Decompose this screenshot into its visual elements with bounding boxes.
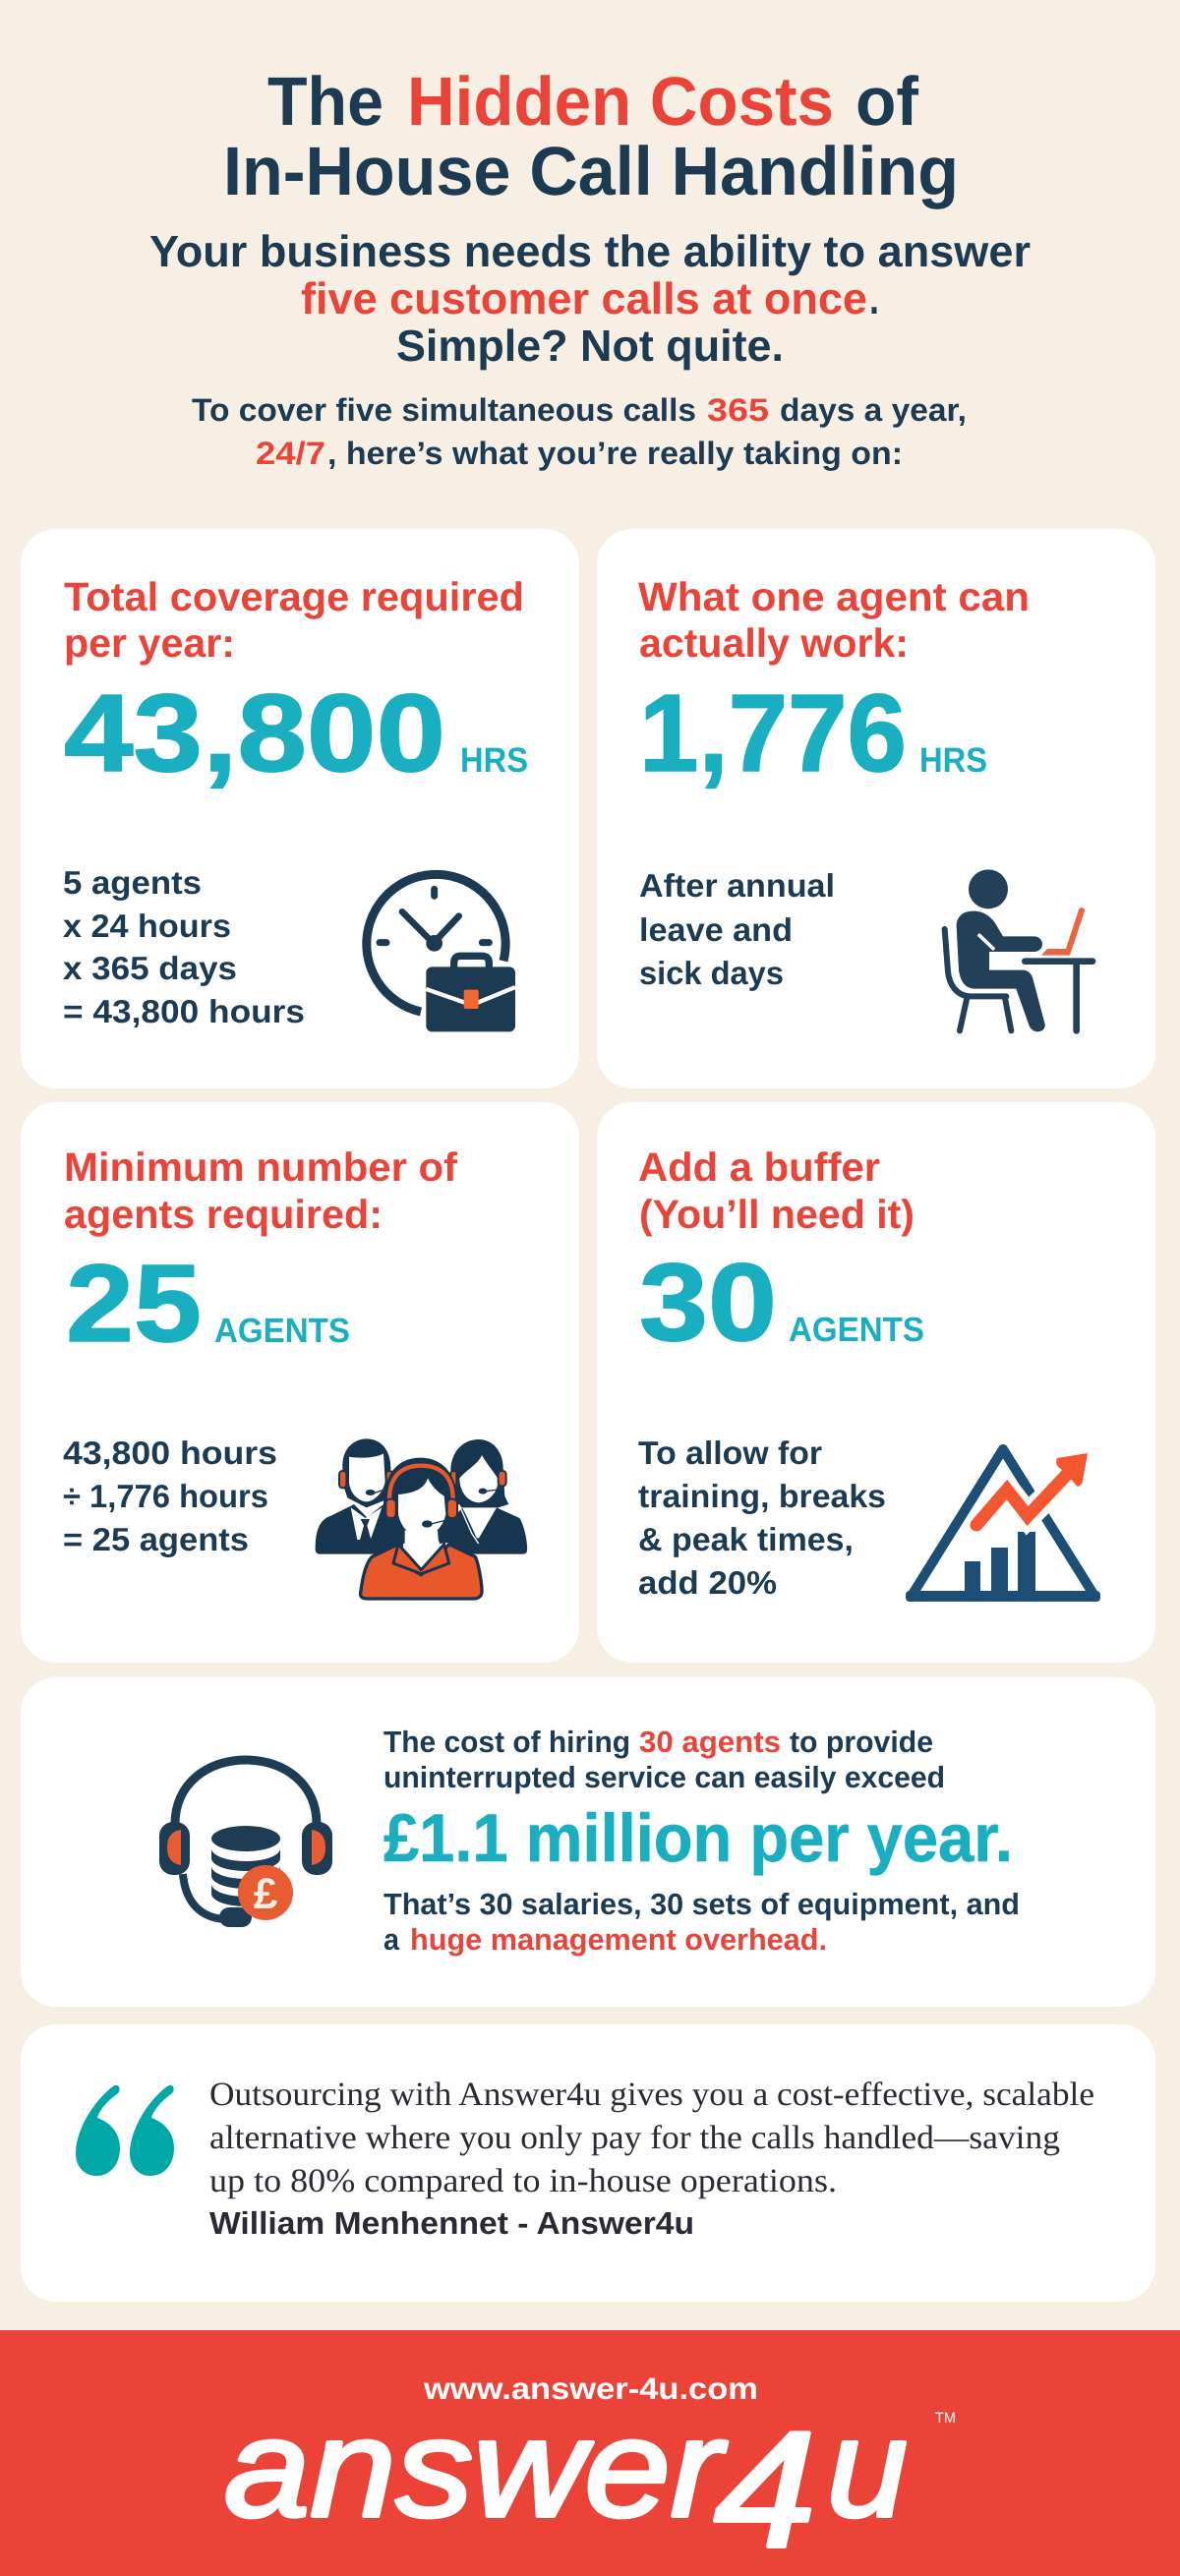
- stat: 1,776 HRS: 1,776: [639, 672, 907, 794]
- heading: buffer: [638, 1144, 914, 1237]
- heading: minimum agents: agents required:: [64, 1192, 383, 1237]
- footer band: [0, 2330, 1180, 2576]
- stat: 25 AGENTS: 25: [66, 1242, 202, 1365]
- quote text: Outsourcing with Answer4u gives you a cost-effective, scalable: [209, 2077, 1094, 2113]
- stat: £1.1 million per year: £1.1 million per year.: [384, 1800, 1013, 1876]
- title: Hidden Costs: [407, 63, 834, 140]
- cost intro text: to provide: [790, 1726, 933, 1759]
- quote text: alternative where you only pay for the calls handled—saving: [209, 2120, 1060, 2156]
- intro text: 24/7: [256, 436, 325, 471]
- logo wordmark: [224, 2390, 908, 2576]
- note text: add 20%: [638, 1564, 777, 1601]
- quote attribution: William Menhennet - Answer4u: [209, 2205, 694, 2241]
- heading: total coverage: per year:: [64, 620, 235, 666]
- quote text: up to 80% compared to in-house operations.: [209, 2163, 837, 2199]
- intro text: , here’s what you’re really taking on:: [327, 436, 903, 471]
- calculation text: 43,800 hours: [63, 1434, 277, 1471]
- calculation text: x 24 hours: [63, 907, 231, 944]
- stat: 30 AGENTS: 30: [639, 1241, 777, 1364]
- icon: headset with coins and pound: £: [254, 1870, 278, 1918]
- title: [223, 63, 959, 209]
- panel: quote: [21, 2024, 1155, 2302]
- note text: After annual: [639, 867, 835, 904]
- quote text: [209, 2077, 1094, 2199]
- note text: training, breaks: [638, 1478, 886, 1514]
- icon: person at laptop: [945, 869, 1092, 1031]
- trademark: TM: [935, 2410, 956, 2427]
- intro text: 365: [707, 392, 769, 428]
- cost detail text: [384, 1888, 1020, 1957]
- note text: [639, 867, 835, 991]
- title: In-House Call Handling: [223, 133, 959, 209]
- panel: one agent: [597, 529, 1155, 1088]
- website url: www.answer-4u.com: [423, 2371, 758, 2406]
- heading: minimum agents: [64, 1144, 457, 1237]
- panel: buffer: [597, 1102, 1155, 1663]
- panel: minimum agents: [21, 1102, 579, 1663]
- heading: buffer: Add a buffer: [638, 1144, 880, 1190]
- intro text: days a year,: [780, 392, 967, 428]
- calculation text: ÷ 1,776 hours: [63, 1478, 268, 1514]
- cost detail text: huge management overhead.: [410, 1923, 827, 1957]
- calculation text: 5 agents: [63, 864, 202, 901]
- heading: one agent: actually work:: [639, 620, 909, 666]
- icon: quotation marks: [76, 2085, 174, 2176]
- note text: [638, 1434, 886, 1601]
- cost detail text: That’s 30 salaries, 30 sets of equipment, and: [384, 1888, 1020, 1921]
- stat: 43,800 HRS: 43,800: [64, 672, 445, 794]
- calculation text: [63, 1434, 277, 1557]
- calculation text: [63, 864, 305, 1029]
- logo wordmark: answer: [224, 2390, 728, 2547]
- icon: call centre agents: [316, 1438, 527, 1599]
- heading: one agent: What one agent can: [638, 574, 1030, 619]
- note text: leave and: [639, 911, 793, 948]
- subtitle: five customer calls at once: [301, 273, 867, 323]
- heading: total coverage: Total coverage required: [64, 574, 524, 619]
- calculation text: = 43,800 hours: [63, 993, 305, 1029]
- heading: buffer: (You’ll need it): [639, 1192, 914, 1237]
- note text: To allow for: [638, 1434, 822, 1471]
- title: of: [856, 63, 919, 140]
- stat: 30 AGENTS: [639, 1241, 924, 1364]
- calculation text: = 25 agents: [63, 1521, 249, 1557]
- heading: one agent: [638, 574, 1030, 666]
- intro text: To cover five simultaneous calls: [192, 392, 696, 428]
- subtitle: Your business needs the ability to answer: [149, 226, 1031, 276]
- stat: 1,776 HRS: HRS: [919, 740, 987, 780]
- logo wordmark: u: [827, 2390, 908, 2547]
- stat: 43,800 HRS: HRS: [460, 740, 528, 780]
- icon: headset with coins and pound: [159, 1760, 332, 1927]
- subtitle: Simple? Not quite.: [396, 321, 784, 371]
- note text: & peak times,: [638, 1521, 854, 1557]
- calculation text: x 365 days: [63, 950, 237, 986]
- stat: 25 AGENTS: AGENTS: [214, 1312, 350, 1350]
- cost intro text: uninterrupted service can easily exceed: [384, 1761, 945, 1794]
- icon: clock and briefcase: [367, 874, 515, 1031]
- stat: 30 AGENTS: AGENTS: [789, 1311, 924, 1349]
- cost intro text: [384, 1726, 945, 1794]
- cost intro text: 30 agents: [639, 1726, 781, 1759]
- icon: rising chart in triangle: [906, 1449, 1100, 1602]
- cost intro text: The cost of hiring: [384, 1726, 630, 1759]
- heading: total coverage: [64, 574, 524, 666]
- subtitle: .: [869, 273, 879, 323]
- panel: total coverage: [21, 529, 579, 1088]
- subtitle: [149, 226, 1031, 371]
- stat: 25 AGENTS: [66, 1242, 350, 1365]
- heading: minimum agents: Minimum number of: [64, 1144, 457, 1190]
- cost detail text: a: [384, 1923, 400, 1957]
- intro text: [192, 392, 967, 471]
- panel: cost summary: [21, 1677, 1155, 2007]
- note text: sick days: [639, 955, 784, 991]
- title: The: [267, 63, 384, 140]
